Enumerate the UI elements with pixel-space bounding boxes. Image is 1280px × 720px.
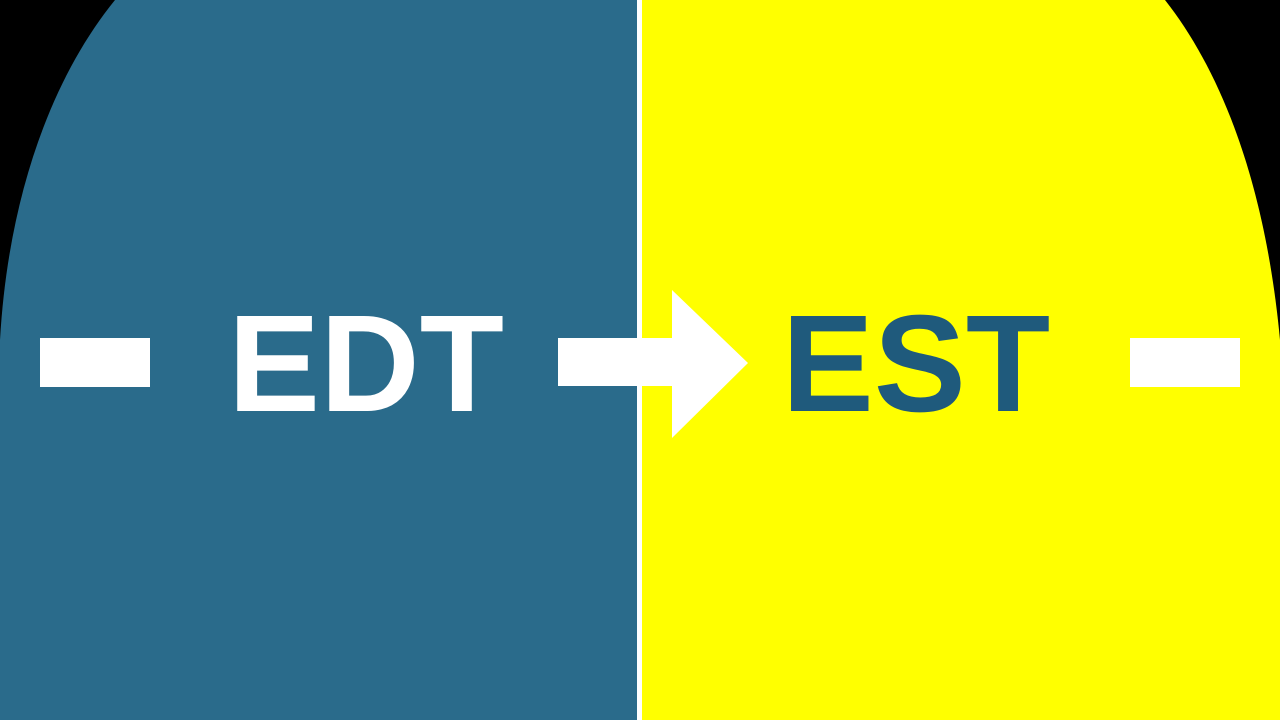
label: EDT: EDT <box>228 287 504 441</box>
left dash <box>40 338 150 387</box>
label: EST: EST <box>782 287 1050 441</box>
panel: EDT blue half <box>0 0 639 720</box>
right dash <box>1130 338 1240 387</box>
arrow <box>558 290 748 438</box>
panel: EST yellow half <box>641 0 1280 720</box>
